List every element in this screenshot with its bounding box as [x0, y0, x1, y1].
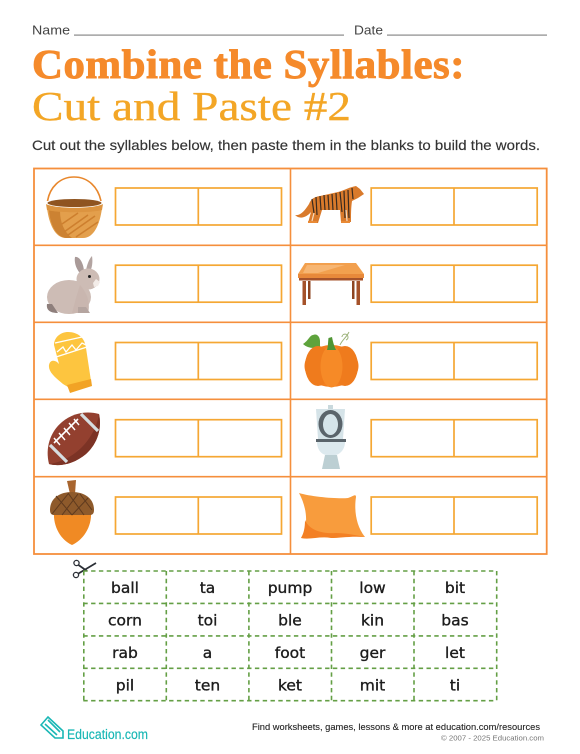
footer text [252, 722, 544, 742]
icon: acorn [50, 480, 94, 545]
icon: pillow [299, 493, 365, 539]
syllables row 3 [112, 644, 465, 662]
logo: Education.com: Education.com [67, 727, 148, 742]
syllables row 4: ket [278, 676, 302, 694]
syllables row 4: ten [195, 676, 220, 694]
title [32, 41, 465, 129]
icon: rabbit [47, 256, 100, 314]
syllables row 2: ble [278, 612, 302, 630]
answer boxes: left column [116, 188, 282, 534]
icon: tiger [295, 186, 364, 223]
syllables row 1: low [359, 579, 386, 597]
icon: football [48, 413, 100, 465]
logo: Education.com [41, 717, 148, 742]
syllables row 4: ti [450, 676, 460, 694]
syllables row 4 [116, 676, 460, 694]
title: Cut and Paste #2 [32, 83, 351, 129]
syllables row 1 [111, 579, 465, 597]
syllables row 4: pil [116, 676, 134, 694]
syllables row 2: bas [441, 612, 469, 630]
name and date fields: Date [354, 22, 383, 38]
syllables row 4: mit [360, 676, 385, 694]
word table [34, 168, 547, 554]
title: Combine the Syllables: [32, 41, 465, 87]
cut-out syllable grid [83, 571, 497, 701]
icon: table [298, 263, 364, 305]
syllables row 1: pump [268, 579, 312, 597]
answer boxes: right column [371, 188, 537, 534]
syllables row 2: corn [108, 612, 142, 630]
icon: mitten [49, 332, 92, 393]
syllables row 3: foot [275, 644, 305, 662]
footer text: © 2007 - 2025 Education.com [441, 734, 544, 742]
syllables row 3: a [203, 644, 212, 662]
icon: basket [46, 177, 103, 238]
name and date fields [32, 22, 547, 38]
syllables row 2: toi [198, 612, 217, 630]
syllables row 3: let [445, 644, 465, 662]
icon: pumpkin [303, 332, 358, 388]
icon: toilet [316, 405, 346, 469]
footer text: Find worksheets, games, lessons & more at education.com/resources [252, 722, 540, 733]
name and date fields: Name [32, 22, 70, 38]
scissors icon [73, 560, 96, 578]
syllables row 1: bit [445, 579, 465, 597]
syllables row 3: ger [360, 644, 386, 662]
instructions: Cut out the syllables below, then paste them in the blanks to build the words. [32, 137, 540, 153]
syllables row 2: kin [361, 612, 384, 630]
syllables row 2 [108, 612, 469, 630]
syllables row 3: rab [112, 644, 138, 662]
syllables row 1: ta [200, 579, 215, 597]
syllables row 1: ball [111, 579, 139, 597]
